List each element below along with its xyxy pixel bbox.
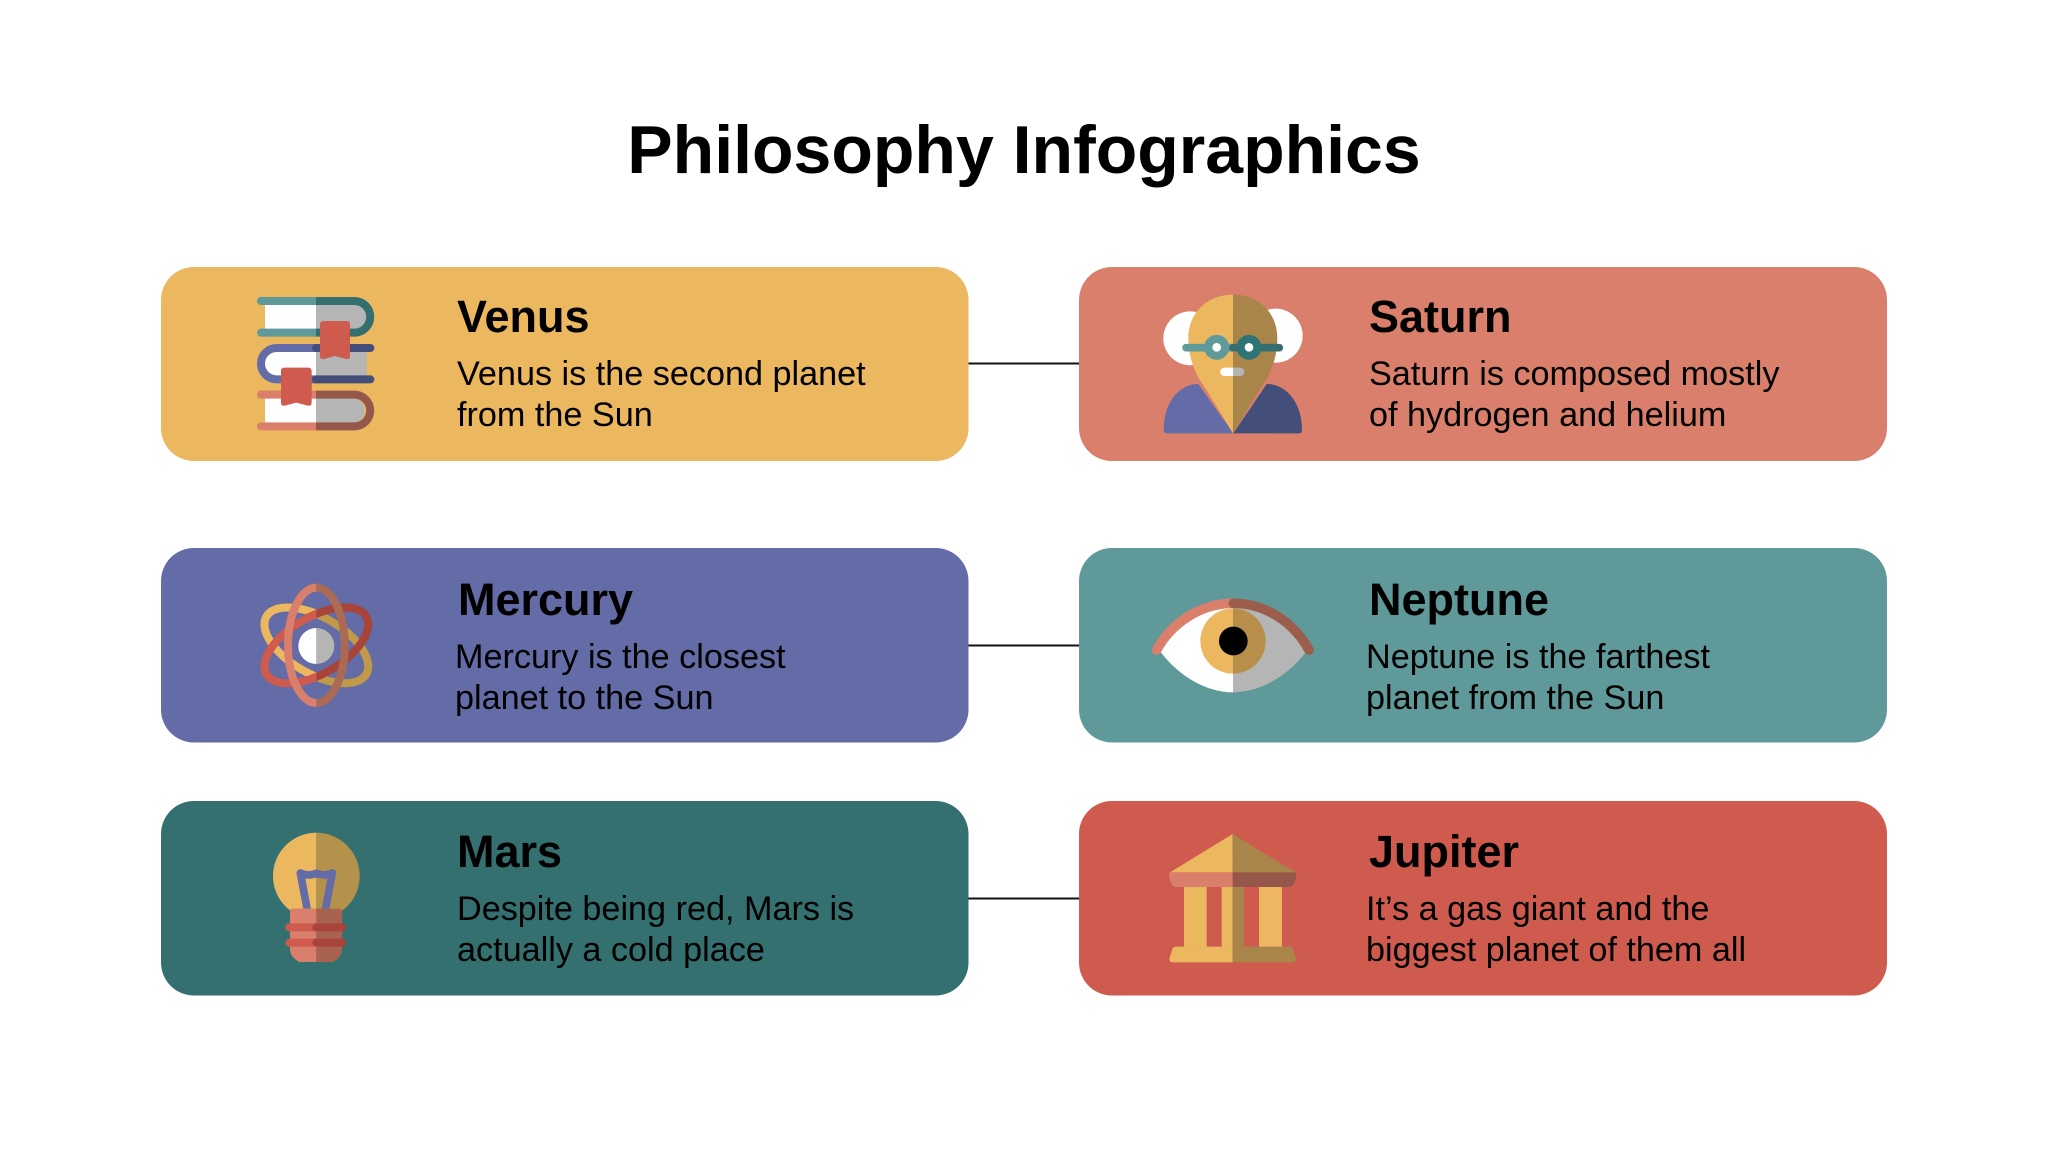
heading: Mars: Mars [457, 826, 562, 877]
description: Saturn: of hydrogen and helium [1369, 396, 1726, 434]
panel: Neptune [1079, 548, 1887, 742]
description: Venus: Venus is the second planet [457, 355, 866, 393]
description: Jupiter: It’s a gas giant and the [1366, 890, 1709, 928]
icon: eye [1157, 603, 1309, 692]
panel: Venus [161, 267, 968, 461]
panel: Saturn [1079, 267, 1887, 461]
icon: atom [252, 588, 380, 703]
description: Neptune: planet from the Sun [1366, 679, 1664, 717]
description: Mercury: planet to the Sun [455, 679, 714, 717]
heading: Mercury: Mercury [458, 574, 633, 625]
description: Neptune: Neptune is the farthest [1366, 638, 1710, 676]
panel: Jupiter [1079, 801, 1887, 996]
description: Jupiter: biggest planet of them all [1366, 931, 1746, 969]
panel: Mercury [161, 548, 968, 742]
heading: Jupiter: Jupiter [1369, 826, 1519, 877]
description: Mercury: Mercury is the closest [455, 638, 786, 676]
description: Saturn: Saturn is composed mostly [1369, 355, 1780, 393]
description: Mars: Despite being red, Mars is [457, 890, 854, 928]
title: Philosophy Infographics [627, 112, 1421, 188]
connector: Mars to Jupiter [968, 898, 1079, 900]
heading: Saturn: Saturn [1369, 291, 1512, 342]
panel: Mars [161, 801, 968, 996]
connector: Venus to Saturn [968, 362, 1079, 364]
icon: stacked books [261, 301, 370, 426]
description: Venus: from the Sun [457, 396, 653, 434]
connector: Mercury to Neptune [968, 644, 1079, 646]
heading: Neptune: Neptune [1369, 574, 1549, 625]
icon: light bulb [273, 833, 360, 962]
description: Mars: actually a cold place [457, 931, 765, 969]
icon: temple [1169, 834, 1296, 962]
icon: philosopher [1163, 295, 1303, 433]
heading: Venus: Venus [457, 291, 590, 342]
